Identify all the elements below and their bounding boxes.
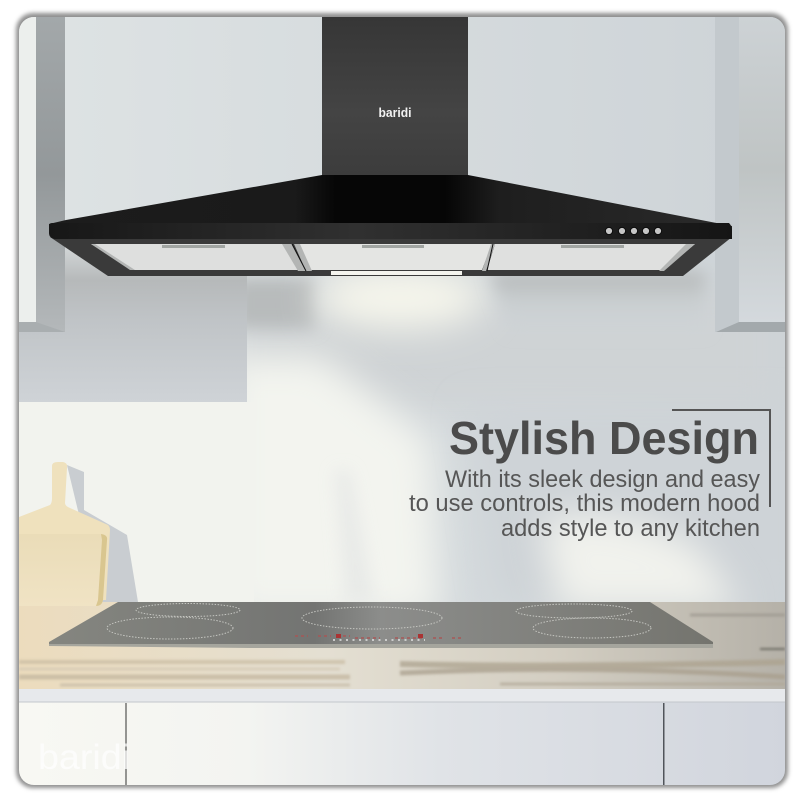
filter frames — [91, 244, 695, 271]
cooktop — [49, 602, 713, 648]
wall light patches — [247, 276, 736, 602]
description — [409, 466, 760, 542]
right filter — [487, 244, 695, 270]
lower left lit wall — [19, 402, 254, 607]
brand logo: baridi — [378, 106, 412, 120]
cooking zones — [107, 604, 651, 639]
cutting boards — [19, 462, 138, 606]
front board — [19, 600, 103, 602]
hood underside — [50, 237, 732, 276]
description: With its sleek design and easy — [445, 466, 760, 493]
left filter — [91, 244, 300, 270]
middle filter — [296, 244, 492, 270]
wall — [19, 17, 785, 617]
chimney — [322, 17, 468, 176]
control buttons — [605, 227, 662, 235]
hood front band — [49, 223, 732, 239]
left cabinet side — [19, 17, 65, 332]
cabinet top strip — [19, 689, 785, 702]
cabinets — [19, 702, 785, 786]
touch controls — [295, 634, 462, 640]
range hood — [49, 175, 732, 276]
right side hood shadow — [490, 268, 707, 302]
heading: Stylish Design — [449, 412, 759, 464]
corner bracket — [672, 410, 770, 507]
paddle board — [19, 462, 110, 600]
upper cabinet shadow — [19, 240, 247, 402]
description: adds style to any kitchen — [501, 515, 760, 542]
hood light — [331, 271, 462, 275]
board shadow — [67, 465, 138, 602]
right cabinet side — [715, 17, 785, 332]
countertop — [19, 602, 785, 689]
description: to use controls, this modern hood — [409, 490, 760, 517]
hood canopy — [49, 175, 732, 232]
wood grain — [19, 615, 785, 685]
filter handles — [162, 245, 624, 248]
text block — [409, 410, 770, 542]
watermark logo: baridi — [38, 738, 130, 777]
